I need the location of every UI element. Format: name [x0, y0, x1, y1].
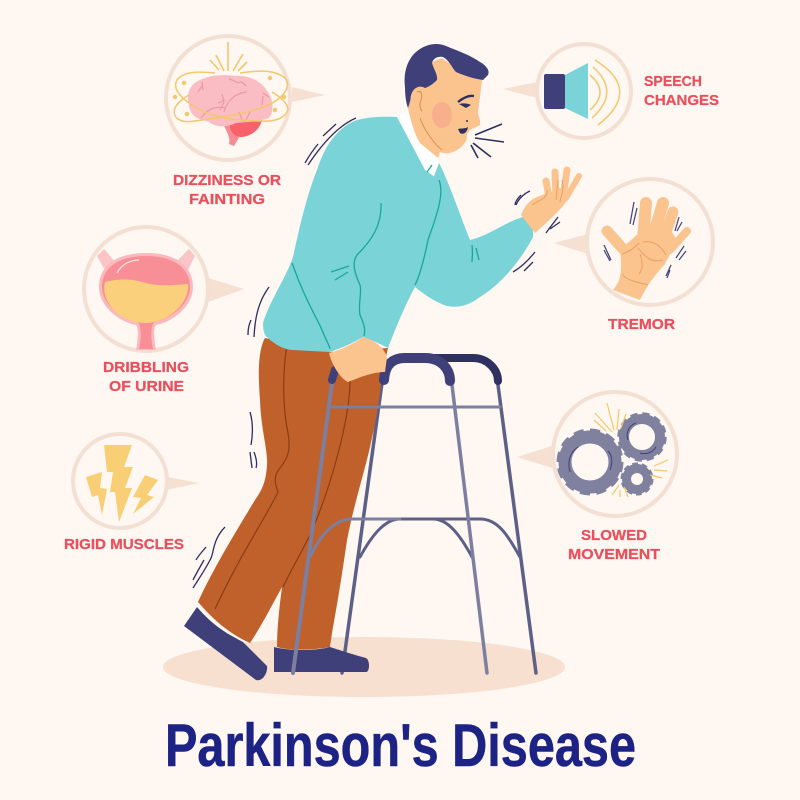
label: dizziness or fainting: DIZZINESS OR	[173, 172, 281, 189]
sweater: body	[263, 117, 439, 352]
panel: dizziness or fainting	[166, 36, 325, 208]
callout pointer: dribbling	[208, 278, 244, 302]
label: dribbling of urine: OF URINE	[109, 378, 184, 395]
callout pointer: rigid	[166, 477, 199, 490]
man figure	[184, 44, 579, 680]
label: tremor: TREMOR	[608, 316, 675, 333]
label: speech changes: SPEECH	[644, 73, 702, 90]
ground shadow	[163, 637, 565, 697]
label: slowed movement: SLOWED	[581, 527, 647, 544]
sweater seams	[292, 165, 479, 349]
rear shoe	[274, 647, 369, 672]
sweater: arm	[415, 163, 533, 307]
label: slowed movement: MOVEMENT	[568, 546, 660, 563]
callout pointer: dizziness	[292, 87, 325, 102]
icon: lightning bolts	[86, 445, 158, 522]
callout pointer: speech	[503, 82, 537, 98]
callout pointer: slowed	[517, 446, 552, 468]
label: rigid muscles: RIGID MUSCLES	[64, 536, 184, 553]
icon: brain	[173, 42, 288, 146]
ear	[410, 88, 425, 114]
panel: rigid muscles	[64, 434, 199, 553]
rear walker legs	[342, 383, 536, 673]
label: dribbling of urine: DRIBBLING	[103, 359, 189, 376]
front walker frame	[293, 383, 500, 673]
icon: gears	[559, 403, 668, 497]
icon: open hand	[604, 202, 687, 300]
panel: slowed movement	[517, 392, 677, 563]
head	[405, 44, 504, 158]
neck and collar	[397, 110, 438, 180]
walker handles	[332, 358, 498, 381]
callout pointer: tremor	[554, 234, 588, 254]
panel: speech changes	[503, 44, 719, 138]
breath lines	[471, 124, 504, 158]
front shoe	[184, 607, 267, 680]
label: dizziness or fainting: FAINTING	[189, 191, 265, 208]
tremor lines	[193, 118, 560, 588]
trousers	[198, 338, 388, 650]
label: speech changes: CHANGES	[644, 92, 719, 109]
icon: speaker	[544, 60, 620, 125]
panel: dribbling of urine	[84, 227, 244, 395]
raised hand	[521, 170, 579, 233]
hand on walker	[329, 337, 387, 382]
title: Parkinson's Disease	[165, 712, 636, 779]
panel: tremor	[554, 179, 713, 333]
icon: bladder	[97, 249, 195, 350]
